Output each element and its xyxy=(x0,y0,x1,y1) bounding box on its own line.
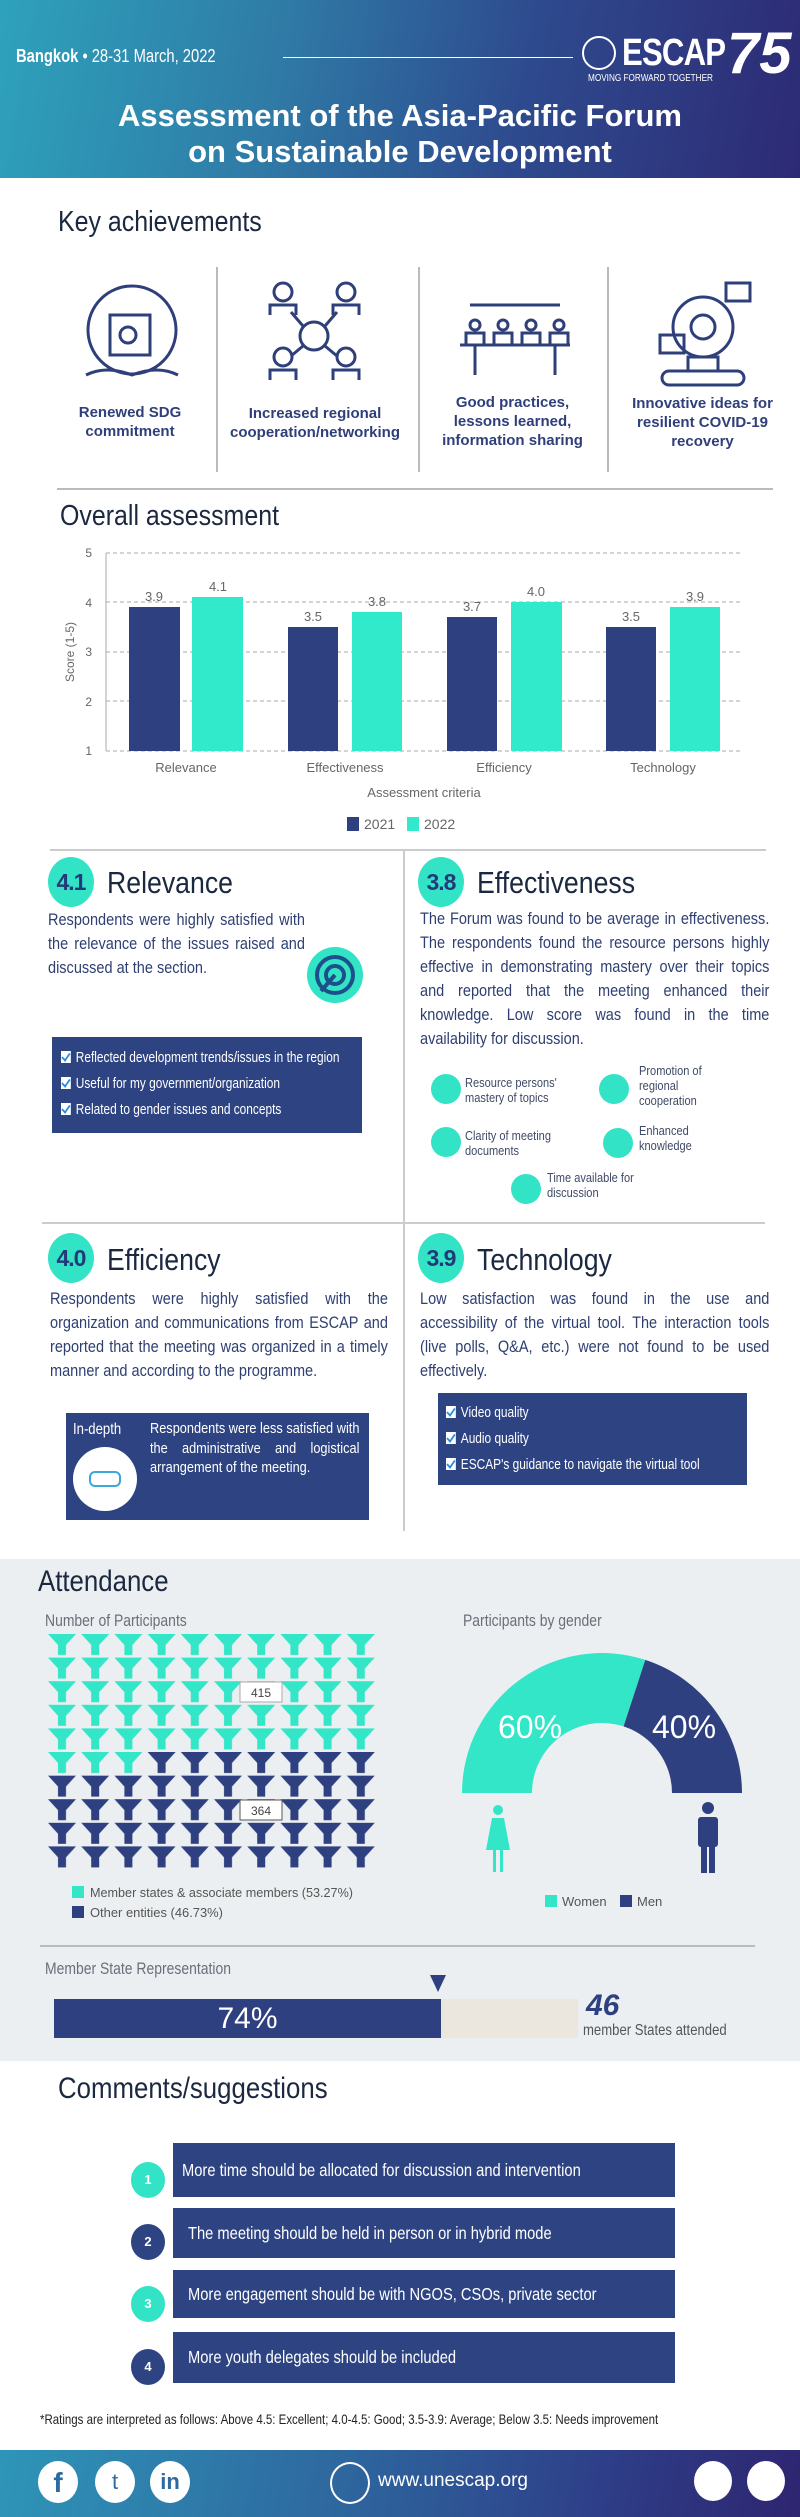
panel: attendance: Participants by gender xyxy=(463,1611,602,1630)
factor items: Resource persons' xyxy=(465,1075,557,1090)
bar chart: 4.0 xyxy=(527,584,545,599)
panel: technology xyxy=(418,1233,769,1485)
factor items xyxy=(431,1063,702,1204)
legend: Other entities (46.73%) xyxy=(90,1905,223,1920)
bar chart: Assessment criteria xyxy=(367,785,481,800)
icon: meeting xyxy=(460,305,570,375)
label: key achievements xyxy=(79,394,773,450)
logo: ESCAP 75 xyxy=(582,21,792,86)
badge 4.0: 4.0 xyxy=(56,1245,85,1271)
icons: key achievements xyxy=(85,282,752,386)
checklist box: Audio quality xyxy=(461,1431,529,1447)
text: resilient COVID-19 xyxy=(637,414,768,431)
icons: social xyxy=(38,2461,78,2503)
label 364: 364 xyxy=(251,1804,271,1818)
bar chart xyxy=(63,546,740,832)
donut chart: gender: 60% xyxy=(498,1709,562,1745)
factor items: Promotion of xyxy=(639,1063,702,1078)
donut chart: gender xyxy=(462,1653,742,1909)
icon: man xyxy=(698,1802,718,1873)
panel: efficiency: Efficiency xyxy=(107,1242,221,1277)
checklist box: Useful for my government/organization xyxy=(76,1076,280,1092)
badge 3.9 xyxy=(418,1233,464,1283)
bar chart: Score (1-5) xyxy=(63,622,77,682)
bar chart: 1 xyxy=(85,744,92,758)
bar chart: 4 xyxy=(85,596,92,610)
legend xyxy=(72,1885,353,1920)
donut chart: gender: Men xyxy=(637,1894,662,1909)
panel: efficiency: Respondents were highly satisfied with the organization and communications from ESCAP and reported that the meeting was organized in a timely manner and according to the programme. xyxy=(50,1290,388,1380)
footer: t xyxy=(112,2469,118,2494)
checklist box: ESCAP's guidance to navigate the virtual tool xyxy=(461,1457,700,1473)
factor items: Clarity of meeting xyxy=(465,1128,551,1143)
text: cooperation/networking xyxy=(230,424,400,441)
footnote: *Ratings are interpreted as follows: Above 4.5: Excellent; 4.0-4.5: Good; 3.5-3.9: Average; Below 3.5: Needs improvement xyxy=(40,2411,658,2427)
panel: effectiveness: Effectiveness xyxy=(477,865,635,900)
logo: ESCAP 75: 75 xyxy=(727,21,792,86)
badge 4.0 xyxy=(48,1233,94,1283)
panel: effectiveness: The Forum was found to be average in effectiveness. The respondents found the resource persons highly effective in demonstrating mastery over their topics and reported that the meeting enhanced their knowledge. Low score was found in the time availability for discussion. xyxy=(420,910,769,1048)
footer: in xyxy=(160,2469,180,2494)
text: Increased regional xyxy=(249,405,381,422)
label 364 xyxy=(240,1800,282,1820)
comment list: The meeting should be held in person or in hybrid mode xyxy=(188,2222,552,2242)
comment list: More engagement should be with NGOS, CSOs, private sector xyxy=(188,2284,597,2304)
bar chart: 3 xyxy=(85,645,92,659)
checklist box: Reflected development trends/issues in the region xyxy=(76,1050,339,1066)
event date: Bangkok • 28-31 March, 2022 xyxy=(16,46,216,66)
in-depth box: Respondents were less satisfied with the administrative and logistical arrangement of the meeting. xyxy=(150,1421,359,1476)
title: Assessment of the Asia-Pacific Forum xyxy=(118,98,682,133)
heading: comments: Comments/suggestions xyxy=(58,2072,328,2105)
title: on Sustainable Development xyxy=(188,134,612,169)
label 415: 415 xyxy=(251,1686,271,1700)
bar chart: 3.5 xyxy=(622,609,640,624)
comment list: 4 xyxy=(144,2359,152,2374)
panel: attendance: Number of Participants xyxy=(45,1611,187,1630)
progress bar: member state representation: 74% xyxy=(217,2002,278,2035)
badge 3.9: 3.9 xyxy=(426,1245,455,1271)
checklist box: Related to gender issues and concepts xyxy=(76,1102,281,1118)
comment list: 2 xyxy=(144,2234,152,2249)
bar chart: 2022 xyxy=(424,816,455,832)
footer: www.unescap.org xyxy=(378,2470,528,2491)
heading: overall assessment: Overall assessment xyxy=(60,500,279,532)
text: information sharing xyxy=(442,432,583,449)
bar chart: Relevance xyxy=(155,760,217,775)
badge 3.8 xyxy=(418,857,464,907)
legend: Member states & associate members (53.27%) xyxy=(90,1885,353,1900)
bar chart: 3.9 xyxy=(686,589,704,604)
icon: target xyxy=(307,947,363,1003)
text: commitment xyxy=(85,423,175,440)
factor items: regional xyxy=(639,1078,678,1093)
panel: efficiency xyxy=(48,1233,388,1520)
checklist box: Video quality xyxy=(461,1405,529,1421)
logo: ESCAP 75: MOVING FORWARD TOGETHER xyxy=(588,73,713,84)
panel: technology: Low satisfaction was found in the use and accessibility of the virtual tool. The interaction tools (live polls, Q&A, etc.) were not found to be used effectively. xyxy=(420,1290,769,1380)
header banner xyxy=(0,0,800,178)
logo: ESCAP 75: ESCAP xyxy=(622,32,725,74)
comment list xyxy=(131,2143,675,2385)
badge 4.1 xyxy=(48,857,94,907)
text: lessons learned, xyxy=(454,413,571,430)
comment list: 3 xyxy=(144,2296,152,2311)
panel: effectiveness xyxy=(418,857,770,1204)
badge 3.8: 3.8 xyxy=(426,869,455,895)
bar chart: 3.8 xyxy=(368,594,386,609)
bar chart: 2 xyxy=(85,695,92,709)
factor items: cooperation xyxy=(639,1093,697,1108)
progress bar: member state representation: 46 xyxy=(586,1989,619,2022)
bar chart: 3.7 xyxy=(463,599,481,614)
text: Renewed SDG xyxy=(79,404,181,421)
comment list: More time should be allocated for discussion and intervention xyxy=(182,2160,581,2180)
panel: attendance xyxy=(0,1559,800,2061)
text: Innovative ideas for xyxy=(632,395,773,412)
comment list: 1 xyxy=(144,2172,152,2187)
panel: attendance: Attendance xyxy=(38,1565,169,1598)
pictogram: participants xyxy=(48,1634,375,1920)
bar chart: 5 xyxy=(85,546,92,560)
title xyxy=(118,98,682,169)
bar chart: 3.9 xyxy=(145,589,163,604)
factor items: mastery of topics xyxy=(465,1090,549,1105)
factor items: discussion xyxy=(547,1185,599,1200)
checklist box xyxy=(438,1393,747,1485)
factor items: documents xyxy=(465,1143,519,1158)
panel: relevance xyxy=(48,857,363,1133)
panel: technology: Technology xyxy=(477,1242,612,1277)
bar chart: Effectiveness xyxy=(306,760,384,775)
text: Good practices, xyxy=(456,394,569,411)
bar chart: Efficiency xyxy=(476,760,532,775)
footer xyxy=(0,2450,800,2517)
bar chart: Technology xyxy=(630,760,696,775)
factor items: Time available for xyxy=(547,1170,634,1185)
checklist box xyxy=(52,1037,362,1133)
in-depth box: In-depth xyxy=(73,1421,121,1438)
panel: attendance: Member State Representation xyxy=(45,1959,231,1978)
bar chart: 2021 xyxy=(364,816,395,832)
panel: relevance: Relevance xyxy=(107,865,233,900)
progress bar: member state representation: member States attended xyxy=(583,2022,727,2039)
icon: globe hand xyxy=(86,286,178,375)
icon: network xyxy=(270,283,359,380)
icon: woman xyxy=(486,1805,510,1872)
icon: bulb gear xyxy=(660,283,750,385)
panel: relevance: Respondents were highly satisfied with the relevance of the issues raised and discussed at the section. xyxy=(48,911,305,977)
donut chart: gender: Women xyxy=(562,1894,607,1909)
factor items: Enhanced xyxy=(639,1123,689,1138)
label 415 xyxy=(240,1682,282,1702)
badge 4.1: 4.1 xyxy=(56,869,85,895)
factor items: knowledge xyxy=(639,1138,692,1153)
bar chart: 3.5 xyxy=(304,609,322,624)
heading: key achievements: Key achievements xyxy=(58,206,262,238)
text: recovery xyxy=(671,433,734,450)
comment list: More youth delegates should be included xyxy=(188,2347,456,2367)
donut chart: gender: 40% xyxy=(652,1709,716,1745)
bar chart: 4.1 xyxy=(209,579,227,594)
in-depth box xyxy=(66,1413,369,1520)
website xyxy=(330,2462,370,2504)
progress bar: member state representation xyxy=(54,1975,727,2039)
icons: social: f xyxy=(53,2467,63,2498)
